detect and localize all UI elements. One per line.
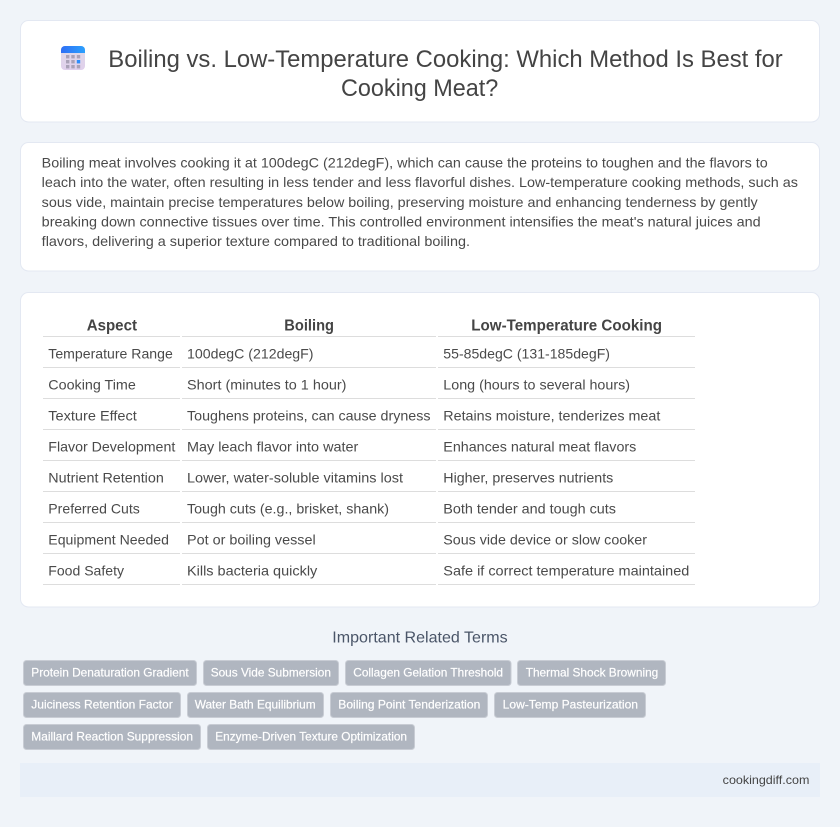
- tag: Low-Temp Pasteurization: [503, 698, 638, 712]
- table row: preferred cuts: [43, 500, 695, 523]
- tag: Protein Denaturation Gradient: [31, 666, 189, 680]
- table row: flavor development: Flavor Development: [48, 438, 175, 454]
- table row: food safety: [43, 562, 695, 585]
- panel: related term tags: [24, 660, 666, 750]
- table row: equipment needed: Equipment Needed: [48, 532, 169, 548]
- tag: [188, 692, 324, 718]
- text block: summary: breaking down connective tissues over time. This controlled environment intensifies the meat's natural juices and: [42, 214, 761, 230]
- text block: summary: [42, 154, 798, 249]
- table row: preferred cuts: Preferred Cuts: [48, 500, 140, 516]
- table row: food safety: Kills bacteria quickly: [187, 562, 317, 578]
- tag: [494, 692, 646, 718]
- table row: flavor development: May leach flavor into water: [187, 438, 359, 454]
- table row: equipment needed: Pot or boiling vessel: [187, 532, 316, 548]
- table row: texture effect: [43, 408, 695, 430]
- table row: food safety: Safe if correct temperature maintained: [443, 562, 689, 578]
- heading: related terms: Important Related Terms: [332, 630, 508, 646]
- panel: summary paragraph: [20, 142, 820, 271]
- tag: [24, 660, 196, 686]
- icon: calendar: [61, 46, 85, 70]
- footer: [20, 763, 820, 797]
- table row: temperature range: 100degC (212degF): [187, 346, 314, 362]
- tag: [24, 692, 180, 718]
- table row: temperature range: Temperature Range: [48, 346, 173, 362]
- table row: preferred cuts: Both tender and tough cuts: [443, 500, 616, 516]
- tag: [24, 724, 200, 750]
- table header row: [43, 318, 695, 337]
- text block: summary: sous vide, maintain precise temperatures below boiling, preserving moisture and enhancing tenderness by gently: [42, 194, 758, 210]
- table row: temperature range: 55-85degC (131-185degF): [443, 346, 610, 362]
- text block: summary: flavors, delivering a superior texture compared to traditional boiling.: [42, 233, 470, 249]
- table row: nutrient retention: Lower, water-soluble vitamins lost: [187, 470, 403, 486]
- text block: summary: Boiling meat involves cooking it at 100degC (212degF), which can cause the proteins to toughen and the flavors to: [42, 154, 768, 170]
- tag: [204, 660, 338, 686]
- tag: Juiciness Retention Factor: [31, 698, 173, 712]
- table header row: Aspect: [87, 318, 138, 334]
- title: [108, 46, 783, 102]
- table row: flavor development: [43, 438, 695, 461]
- table row: cooking time: Short (minutes to 1 hour): [187, 376, 346, 392]
- table row: flavor development: Enhances natural meat flavors: [443, 438, 636, 454]
- table row: nutrient retention: Higher, preserves nutrients: [443, 470, 613, 486]
- tag: [208, 724, 414, 750]
- table row: cooking time: Cooking Time: [48, 376, 136, 392]
- table row: cooking time: Long (hours to several hours): [443, 376, 630, 392]
- table header row: Boiling: [284, 318, 334, 334]
- tag: [330, 692, 488, 718]
- text block: summary: leach into the water, often resulting in less tender and less flavorful dishes. Low-temperature cooking methods, such as: [42, 174, 798, 190]
- panel: comparison table: [20, 292, 820, 607]
- tag: Maillard Reaction Suppression: [31, 730, 193, 744]
- title: Cooking Meat?: [341, 75, 498, 102]
- tag: [518, 660, 666, 686]
- table row: temperature range: [43, 346, 695, 368]
- table row: preferred cuts: Tough cuts (e.g., brisket, shank): [187, 500, 389, 516]
- table row: nutrient retention: Nutrient Retention: [48, 470, 164, 486]
- tag: [346, 660, 511, 686]
- table row: cooking time: [43, 376, 695, 399]
- table row: food safety: Food Safety: [48, 562, 124, 578]
- tag: Enzyme-Driven Texture Optimization: [215, 730, 407, 744]
- table row: equipment needed: Sous vide device or slow cooker: [443, 532, 647, 548]
- footer: cookingdiff.com: [723, 773, 809, 787]
- tag: Thermal Shock Browning: [526, 666, 658, 680]
- table row: equipment needed: [43, 532, 695, 554]
- table row: texture effect: Texture Effect: [48, 408, 137, 424]
- title: Boiling vs. Low-Temperature Cooking: Which Method Is Best for: [108, 46, 783, 73]
- table header row: Low-Temperature Cooking: [471, 318, 662, 334]
- tag: Sous Vide Submersion: [211, 666, 331, 680]
- tag: Collagen Gelation Threshold: [353, 666, 503, 680]
- table row: texture effect: Retains moisture, tenderizes meat: [443, 408, 660, 424]
- panel: header: [20, 20, 820, 122]
- tag: Water Bath Equilibrium: [195, 698, 316, 712]
- table row: texture effect: Toughens proteins, can cause dryness: [187, 408, 430, 424]
- table row: nutrient retention: [43, 470, 695, 492]
- tag: Boiling Point Tenderization: [338, 698, 480, 712]
